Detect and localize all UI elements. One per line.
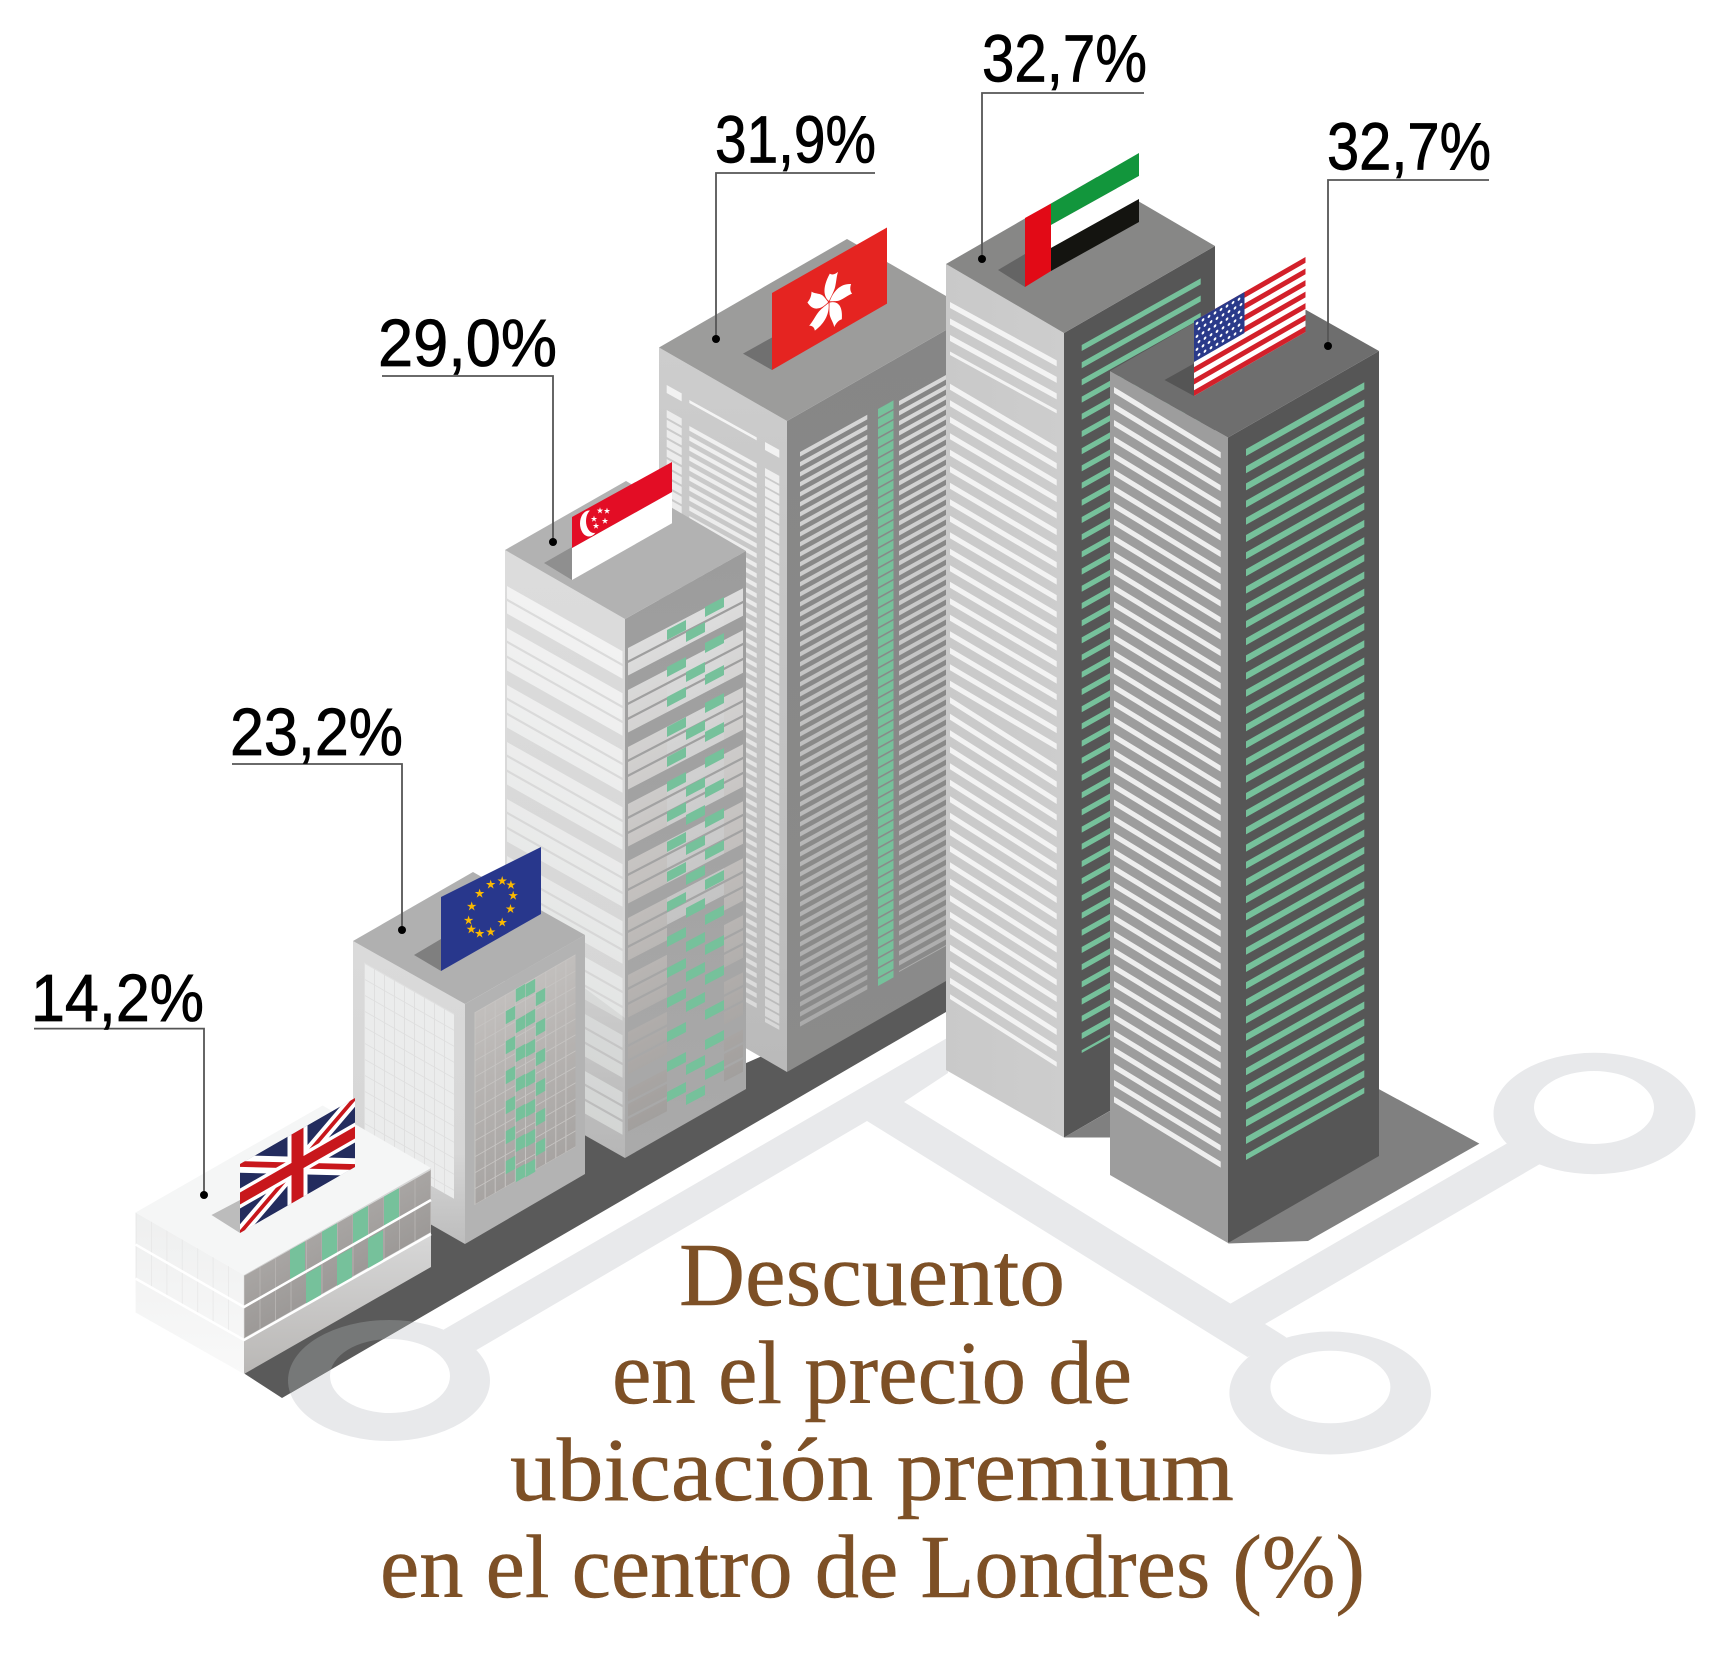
US shadow — [1228, 1089, 1479, 1244]
EU left wall — [353, 941, 465, 1244]
title: ubicación premium — [510, 1421, 1234, 1520]
UAE right wall — [1064, 246, 1215, 1138]
UK right wall cells — [244, 1170, 431, 1339]
title: Descuento — [679, 1226, 1065, 1325]
SG roof notch — [544, 547, 572, 580]
SG right wall — [625, 551, 746, 1158]
title: en el centro de Londres (%) — [380, 1518, 1365, 1617]
road ring seen through shadow — [288, 1320, 414, 1394]
SG roof — [505, 481, 746, 619]
road ring: bottom right — [1229, 1332, 1431, 1454]
building: Hong Kong — [659, 228, 946, 1072]
UAE right windows — [1082, 312, 1201, 1020]
label: 32,7% United States — [1324, 110, 1491, 350]
label: 32,7% United Arab Emirates — [978, 22, 1147, 263]
building: United Kingdom — [136, 1098, 431, 1374]
HK right wall — [787, 330, 946, 1072]
road ring: left — [288, 1320, 490, 1441]
label: 23,2% European Union: 23,2% — [230, 695, 403, 770]
US left windows — [1114, 420, 1221, 1138]
flag: Hong Kong — [772, 228, 887, 370]
building: United States — [1110, 257, 1479, 1243]
UK right wall — [244, 1168, 431, 1374]
label: 14,2% United Kingdom — [31, 961, 208, 1199]
UK roof notch — [212, 1200, 240, 1233]
building: United Arab Emirates — [946, 153, 1215, 1138]
flag: European Union — [441, 847, 541, 971]
SG right windows — [648, 593, 734, 1130]
US right wall — [1228, 351, 1379, 1243]
UK roof — [136, 1106, 431, 1275]
label: 31,9% Hong Kong — [712, 102, 876, 343]
label: 32,7% United Arab Emirates: 32,7% — [982, 22, 1147, 96]
ground shadow band — [245, 975, 946, 1398]
title: en el precio de — [612, 1324, 1132, 1423]
UAE shadow — [1064, 1111, 1110, 1138]
US left wall — [1110, 371, 1228, 1243]
EU right window panel — [474, 954, 576, 1205]
label: 29,0% Singapore — [378, 306, 557, 546]
EU right wall — [465, 935, 585, 1244]
building: Singapore — [505, 462, 746, 1158]
road lines — [444, 1038, 1540, 1357]
HK right windows — [834, 388, 922, 1008]
building: European Union — [353, 847, 585, 1244]
flag: Singapore — [572, 462, 672, 580]
flag: United Arab Emirates — [1025, 153, 1139, 287]
UK left wall — [136, 1212, 244, 1374]
SG left wall — [505, 550, 625, 1158]
EU green windows — [510, 982, 540, 1180]
HK roof notch — [743, 338, 772, 370]
label: 32,7% United States: 32,7% — [1327, 110, 1491, 185]
UAE left wall — [946, 264, 1064, 1138]
label: 23,2% European Union — [230, 695, 406, 934]
UK floor dividers — [136, 1200, 431, 1340]
road ring: top right — [1494, 1053, 1696, 1174]
HK roof — [659, 239, 946, 421]
EU left window panel — [364, 962, 454, 1199]
US right windows — [1246, 416, 1364, 1127]
flag: United States — [1194, 257, 1306, 396]
UK left wall cell lines — [136, 1246, 244, 1308]
label: 14,2% United Kingdom: 14,2% — [31, 961, 204, 1036]
label: 31,9% Hong Kong: 31,9% — [715, 102, 876, 178]
EU roof notch — [414, 939, 441, 971]
SG left windows — [507, 619, 622, 1105]
label: 29,0% Singapore: 29,0% — [378, 306, 557, 381]
HK left wall — [659, 348, 787, 1072]
UAE roof notch — [998, 254, 1025, 287]
UAE left windows — [950, 331, 1057, 1033]
title — [380, 1226, 1365, 1617]
flag: United Kingdom — [240, 1098, 355, 1233]
US roof — [1110, 284, 1379, 438]
road network — [288, 1038, 1696, 1454]
EU roof — [353, 872, 585, 1004]
HK left windows — [667, 385, 779, 1030]
SG green windows — [676, 602, 714, 1100]
US roof notch — [1164, 364, 1194, 396]
UAE roof — [946, 177, 1215, 333]
